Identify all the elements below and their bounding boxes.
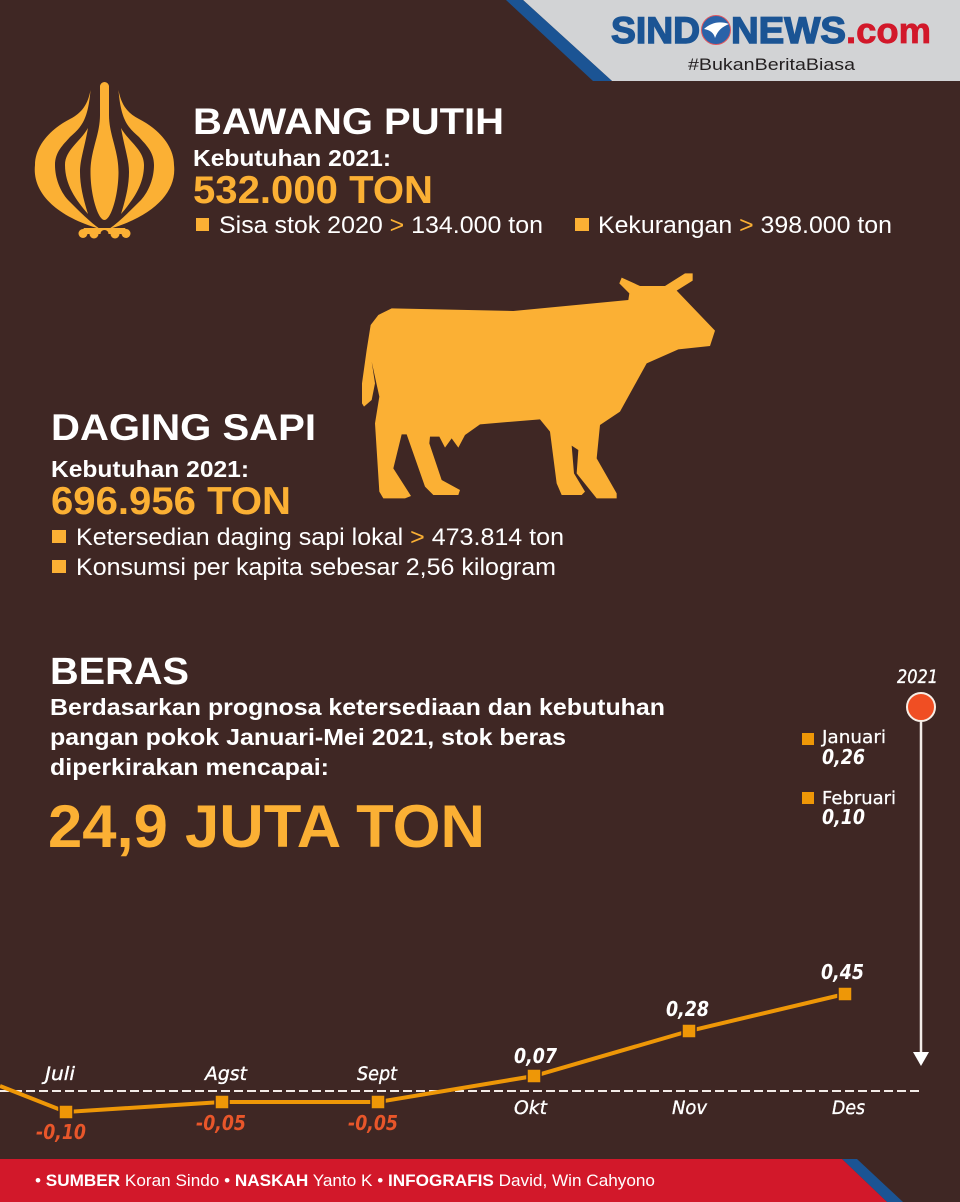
bullet: kekurangan: Kekurangan > 398.000 ton [598,212,892,239]
logo wordmark: .com [846,10,931,51]
heading: bawang putih: BAWANG PUTIH [193,101,504,142]
timeline label: 2021 [897,666,938,688]
paragraph: prognosa: Berdasarkan prognosa ketersediaan dan kebutuhan [50,694,665,720]
timeline start marker [907,693,935,721]
positive values: 0,07 [514,1044,557,1068]
big number: 532.000 ton: 532.000 TON [193,169,433,212]
positive values: 0,45 [821,960,864,984]
month labels: Sept [357,1063,398,1085]
legend: februari: 0,10 [822,805,865,829]
footer banner [0,1159,903,1202]
header logo banner [506,0,960,81]
paragraph: prognosa: pangan pokok Januari-Mei 2021, stok beras [50,724,566,750]
legend: januari: 0,26 [822,745,865,769]
panel: daging sapi [51,407,564,581]
garlic roots [78,228,130,239]
legend: februari: Februari [822,788,896,809]
legend: februari [802,788,896,829]
bullet: konsumsi: Konsumsi per kapita sebesar 2,56 kilogram [76,554,556,581]
panel: beras [48,651,665,860]
heading: daging sapi: DAGING SAPI [51,407,316,448]
arrow head [913,1052,929,1066]
logo wordmark: SIND [611,10,700,51]
legend: januari [802,727,886,769]
logo wordmark: NEWS [731,10,846,51]
positive values: 0,28 [666,997,709,1021]
month labels: Nov [672,1097,708,1119]
subheading: kebutuhan: Kebutuhan 2021: [51,456,249,482]
heading: beras: BERAS [50,651,189,693]
month labels [41,1063,865,1119]
subheading: kebutuhan: Kebutuhan 2021: [193,145,391,171]
data markers [59,987,852,1119]
legend: januari: Januari [821,727,886,748]
month labels: Des [832,1097,865,1119]
negative values: -0,05 [196,1111,246,1135]
timeline 2021 [897,666,938,1066]
negative values [36,1111,398,1144]
logo wordmark [611,10,931,51]
big number: 696.956 ton: 696.956 TON [51,480,291,523]
negative values: -0,05 [348,1111,398,1135]
hashtag tagline: #BukanBeritaBiasa [688,55,856,74]
icon: garlic [35,82,174,239]
bullet: ketersedian: Ketersedian daging sapi lokal > 473.814 ton [76,524,564,551]
paragraph: prognosa [50,694,665,780]
positive values [514,960,864,1068]
footer credits: • SUMBER Koran Sindo • NASKAH Yanto K • INFOGRAFIS David, Win Cahyono [35,1172,655,1190]
month labels: Agst [203,1063,249,1085]
line chart [0,960,923,1144]
big number: 24,9 juta ton: 24,9 JUTA TON [48,793,485,860]
bullet: sisa stok: Sisa stok 2020 > 134.000 ton [219,212,543,239]
panel: bawang putih [193,101,892,239]
month labels: Okt [514,1097,549,1119]
paragraph: prognosa: diperkirakan mencapai: [50,754,329,780]
negative values: -0,10 [36,1120,86,1144]
icon: cow [362,273,715,498]
month labels: Juli [41,1063,76,1085]
